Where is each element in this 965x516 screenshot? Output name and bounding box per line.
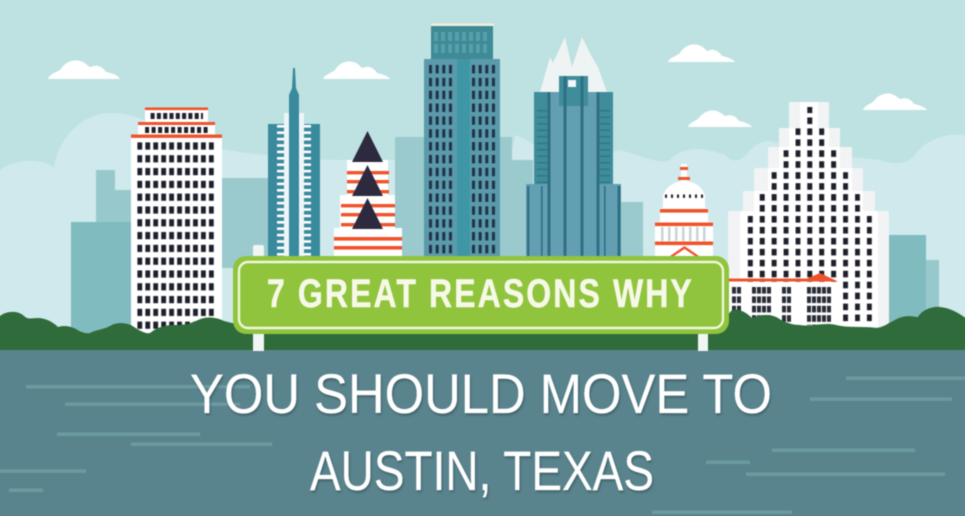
tree line: [0, 307, 965, 351]
tower: slim spire tower: [268, 68, 320, 256]
tower: frost bank style crown tower: [526, 37, 621, 256]
background building right of frost tower: [618, 202, 643, 256]
background buildings: [71, 137, 939, 334]
cloud 3: [668, 44, 735, 62]
building: capitol dome: [655, 164, 713, 256]
tower: tall teal office tower: [424, 24, 500, 256]
tower: triangle-crowned building: [334, 131, 402, 256]
building: low hall with orange roof: [728, 273, 838, 328]
sign heading: 7 GREAT REASONS WHY: [267, 271, 692, 316]
background buildings centre: [395, 137, 533, 256]
title line 2: AUSTIN, TEXAS: [310, 439, 654, 502]
background cloud bank: [0, 113, 965, 340]
green road sign: [233, 256, 729, 334]
small clouds: [48, 44, 927, 127]
cloud 2: [323, 61, 390, 79]
background building left centre: [222, 178, 268, 268]
cloud 4: [688, 110, 752, 127]
background building far left: [71, 170, 131, 334]
title line 1: YOU SHOULD MOVE TO: [190, 362, 772, 425]
water: [0, 350, 965, 516]
water ripples: [0, 376, 965, 514]
sign posts: [253, 245, 708, 351]
cloud 5: [863, 93, 927, 110]
tower: white high-rise with orange bands: [131, 108, 222, 334]
tower: stepped white ziggurat tower: [728, 102, 889, 327]
cloud 1: [48, 60, 120, 79]
background building far right: [889, 235, 939, 325]
